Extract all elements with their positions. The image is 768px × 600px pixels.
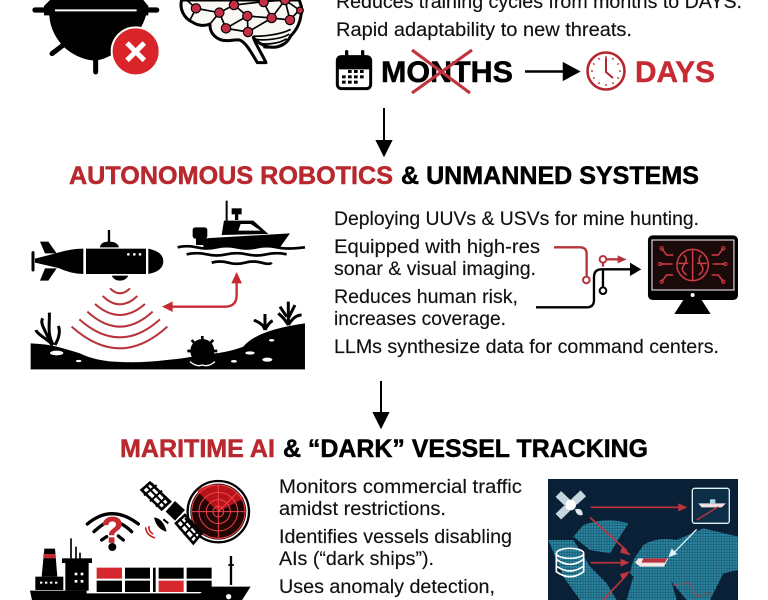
icon: neural network brain bbox=[181, 0, 303, 63]
icon: clock bbox=[588, 52, 624, 90]
text: maritime bullet points: Uses anomaly detection, bbox=[279, 576, 495, 598]
text: robotics bullet points: Deploying UUVs & USVs for mine hunting. bbox=[334, 208, 699, 230]
text: robotics bullet points: Reduces human risk, bbox=[334, 286, 518, 308]
icon: satellite bbox=[142, 483, 202, 543]
text: maritime bullet points: Monitors commercial traffic bbox=[279, 476, 522, 498]
icon: submarine bbox=[33, 230, 163, 281]
icon: monitor with AI brain bbox=[648, 235, 738, 314]
heading: autonomous robotics bbox=[69, 162, 699, 190]
icon: database bbox=[556, 548, 584, 577]
map: dotted continents bbox=[548, 520, 738, 600]
arrow: section 2 to section 3 bbox=[374, 381, 388, 427]
icon: highlighted vessel bbox=[635, 558, 668, 567]
icon: white satellite bbox=[558, 493, 583, 517]
panel: dark vessel tracking map bbox=[548, 479, 738, 600]
inset: vessel detail bbox=[692, 488, 729, 523]
heading: maritime AI bbox=[120, 435, 648, 463]
icon: cargo ship bbox=[30, 538, 251, 600]
illustration: UUV, USV and seabed bbox=[31, 201, 305, 369]
arrow: months to days bbox=[525, 64, 578, 79]
arrow: sonar to boat bbox=[162, 272, 242, 312]
text: maritime bullet points bbox=[279, 476, 522, 600]
heading: maritime AI: MARITIME AI bbox=[120, 435, 275, 463]
icon: surface boat bbox=[178, 201, 305, 264]
text: maritime bullet points: Identifies vessels disabling bbox=[279, 526, 512, 548]
text: robotics bullet points: Equipped with high-res bbox=[334, 236, 540, 258]
label: months crossed out: MONTHS bbox=[381, 56, 513, 89]
heading: maritime AI: & “DARK” VESSEL TRACKING bbox=[283, 435, 648, 463]
icon: naval mine crossed out bbox=[35, 0, 160, 75]
heading: autonomous robotics: & UNMANNED SYSTEMS bbox=[401, 162, 699, 190]
icon: lost signal question mark bbox=[87, 510, 138, 551]
text: robotics bullet points: sonar & visual imaging. bbox=[334, 258, 536, 280]
text: maritime bullet points: AIs (“dark ships”). bbox=[279, 548, 434, 570]
illustration: ship, satellite and radar bbox=[30, 481, 251, 600]
icon: calendar bbox=[337, 52, 371, 89]
red data route bbox=[673, 583, 712, 597]
text: robotics bullet points bbox=[334, 208, 719, 358]
arrow: section 1 to section 2 bbox=[377, 108, 391, 155]
text: rapid adaptability: Rapid adaptability to new threats. bbox=[336, 19, 632, 41]
diagram: data flow lines to monitor bbox=[536, 247, 641, 307]
text: robotics bullet points: LLMs synthesize data for command centers. bbox=[334, 336, 719, 358]
text: robotics bullet points: increases coverage. bbox=[334, 308, 506, 330]
text: maritime bullet points: amidst restrictions. bbox=[279, 498, 446, 520]
icon: radar bbox=[188, 481, 249, 542]
arrows: data flows to vessel bbox=[590, 503, 697, 600]
label: days: DAYS bbox=[635, 56, 715, 89]
icon: lost signal question mark: ? bbox=[101, 510, 123, 551]
icon: sonar waves bbox=[72, 288, 167, 348]
heading: autonomous robotics: AUTONOMOUS ROBOTICS bbox=[69, 162, 393, 190]
seabed with coral and mine bbox=[31, 302, 305, 369]
